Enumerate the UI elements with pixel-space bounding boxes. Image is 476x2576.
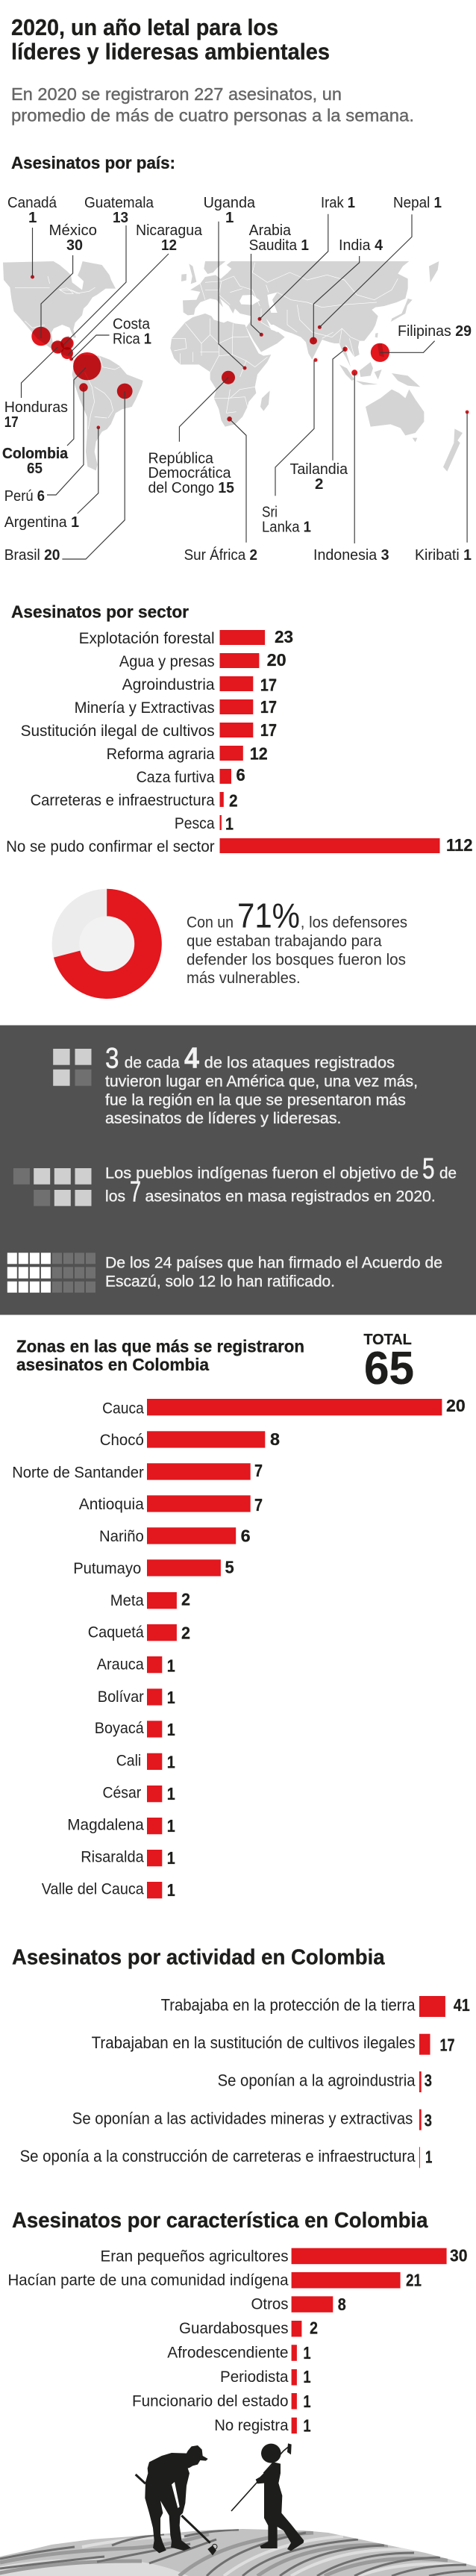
text: pueblos indígenas: 5 — [422, 1153, 435, 1185]
map: madagascar — [260, 390, 270, 411]
map: south america — [72, 355, 143, 470]
country labels: Sur África 2 — [184, 546, 257, 564]
world map — [3, 261, 463, 472]
text: pueblos indígenas: asesinatos en masa registrados en 2020. — [145, 1187, 436, 1205]
bar chart: característica: Funcionario del estado — [132, 2392, 289, 2410]
bar chart: zonas — [12, 1396, 466, 1900]
bar chart: zonas: Boyacá — [95, 1719, 144, 1737]
bar chart: característica: Eran pequeños agricultores — [100, 2247, 288, 2265]
icon: 5 of 7 squares — [13, 1168, 91, 1206]
bar chart: característica: 1 — [303, 2392, 311, 2411]
text: 71% of defenders: que estaban trabajando para — [187, 932, 382, 950]
bar chart: sector: Explotación forestal — [79, 629, 215, 647]
bar chart: zonas: 7 — [254, 1495, 263, 1515]
country labels: 1 — [28, 209, 37, 226]
bar chart: sector: 23 — [275, 627, 293, 646]
heading: actividad: Asesinatos por actividad en Colombia — [12, 1946, 385, 1970]
total 65: TOTAL — [363, 1332, 412, 1348]
bar chart: zonas: Arauca — [97, 1656, 144, 1674]
country labels: Sri — [262, 504, 278, 521]
bar chart: zonas: 1 — [167, 1752, 175, 1771]
bar chart: actividad: 17 — [440, 2035, 455, 2054]
icon: 3 of 4 squares — [53, 1049, 91, 1086]
country labels: del Congo 15 — [148, 479, 234, 496]
bar chart: característica: Otros — [251, 2295, 288, 2313]
bar chart: zonas: 5 — [225, 1558, 234, 1577]
leader lines — [21, 214, 467, 559]
bar chart: característica — [7, 2245, 467, 2435]
bar chart: sector: Pesca — [175, 814, 215, 832]
country labels: 2 — [315, 475, 323, 493]
bar chart: zonas: Valle del Cauca — [42, 1880, 144, 1897]
text: pueblos indígenas — [105, 1153, 457, 1208]
text: 3 de cada 4: de los ataques registrados — [204, 1054, 395, 1072]
illustration: furrowed field — [0, 2529, 476, 2576]
map: eurasia — [183, 261, 409, 367]
country labels: Nicaragua — [136, 222, 203, 239]
country labels: Uganda — [204, 194, 256, 211]
icon: 12 of 24 squares — [7, 1253, 95, 1293]
text: 3 de cada 4: tuvieron lugar en América que, una vez más, — [105, 1073, 418, 1091]
bar chart: actividad — [20, 1995, 470, 2168]
bar chart: zonas: 2 — [181, 1624, 190, 1643]
subtitle: En 2020 se registraron 227 asesinatos, un — [11, 84, 342, 104]
bar chart: sector: Minería y Extractivas — [75, 699, 215, 717]
bar chart: actividad: 3 — [425, 2110, 432, 2130]
bar chart: zonas: 1 — [167, 1688, 175, 1707]
text: 3 de cada 4: de cada — [125, 1054, 180, 1072]
country labels: Perú 6 — [4, 487, 45, 505]
bar chart: zonas: 1 — [167, 1816, 175, 1836]
bar chart: sector: 20 — [267, 650, 286, 670]
bar chart: característica: 30 — [450, 2245, 467, 2265]
text: Acuerdo de Escazú: Escazú, solo 12 lo han ratificado. — [105, 1272, 335, 1290]
bar chart: característica: 1 — [303, 2367, 311, 2386]
text: Acuerdo de Escazú: De los 24 países que han firmado el Acuerdo de — [105, 1253, 442, 1271]
illustration: farmer silhouette — [136, 2445, 217, 2555]
bar chart: zonas: 2 — [181, 1590, 190, 1609]
country labels: Rica 1 — [113, 331, 151, 348]
country labels: Canadá — [7, 194, 57, 211]
bar chart: zonas: Caquetá — [88, 1624, 144, 1641]
map: africa — [170, 314, 271, 427]
bar chart: actividad: Trabajaban en la sustitución de cultivos ilegales — [92, 2033, 416, 2052]
bar chart: zonas: Nariño — [99, 1527, 144, 1545]
title — [11, 14, 330, 64]
bar chart: sector: 2 — [229, 791, 238, 811]
country labels: 65 — [27, 460, 43, 477]
text: pueblos indígenas: 7 — [130, 1176, 141, 1208]
bar chart: sector: No se pudo confirmar el sector — [6, 838, 215, 855]
bar chart: sector: 12 — [250, 744, 268, 764]
bar chart: sector: 1 — [225, 814, 234, 834]
bar chart: actividad: 1 — [425, 2147, 433, 2166]
country labels: Indonesia 3 — [313, 546, 389, 564]
bar chart: actividad: Se oponía a la construcción de carreteras e infraestructura — [20, 2147, 416, 2165]
heading: zonas en Colombia: asesinatos en Colombia — [16, 1355, 209, 1374]
bar chart: sector: Caza furtiva — [137, 768, 215, 786]
bar chart: actividad: Se oponían a la agroindustria — [218, 2071, 416, 2090]
map: new zealand — [443, 428, 463, 472]
subtitle: promedio de más de cuatro personas a la semana. — [11, 106, 414, 125]
text: Acuerdo de Escazú — [105, 1253, 442, 1290]
bar chart: característica: No registra — [214, 2416, 289, 2434]
illustration: child silhouette — [231, 2443, 304, 2551]
heading: asesinatos por sector: Asesinatos por sector — [11, 602, 189, 621]
country labels: Honduras — [4, 399, 68, 416]
text: 71% of defenders: Con un — [187, 914, 234, 932]
text: 3 de cada 4: 3 — [105, 1042, 119, 1075]
text: 71% of defenders: defender los bosques fueron los — [187, 950, 406, 968]
bar chart: zonas: Putumayo — [73, 1559, 141, 1577]
bar chart: sector: 17 — [260, 720, 277, 740]
bar chart: sector: Agua y presas — [119, 652, 215, 670]
bar chart: zonas: Bolívar — [98, 1688, 144, 1706]
title: 2020, un año letal para los — [11, 14, 278, 40]
country labels: 30 — [66, 237, 83, 254]
heading: zonas en Colombia: Zonas en las que más se registraron — [16, 1337, 304, 1356]
bar chart: sector: 6 — [236, 765, 245, 785]
country labels: 12 — [161, 237, 177, 254]
map: australia — [366, 390, 424, 442]
heading: característica: Asesinatos por característica en Colombia — [12, 2209, 428, 2233]
country labels: 13 — [113, 209, 128, 226]
bar chart: zonas: Cauca — [102, 1399, 144, 1417]
bar chart: característica: Periodista — [220, 2368, 289, 2386]
country labels: Arabia — [249, 222, 292, 239]
text: 3 de cada 4: fue la región en la que se presentaron más — [105, 1091, 406, 1109]
bar chart: zonas: Magdalena — [67, 1815, 144, 1833]
country labels: 17 — [4, 414, 19, 431]
bar chart: zonas: Antioquia — [79, 1495, 144, 1513]
bar chart: actividad: 3 — [425, 2071, 432, 2090]
text: pueblos indígenas: Los pueblos indígenas fueron el objetivo de — [105, 1164, 419, 1182]
bar chart: característica: Afrodescendiente — [167, 2344, 288, 2362]
bar chart: actividad: 41 — [454, 1995, 470, 2015]
text: pueblos indígenas: los — [105, 1187, 125, 1205]
bar chart: zonas: 1 — [167, 1656, 175, 1675]
text: 71% of defenders: más vulnerables. — [187, 969, 301, 987]
map: seas — [239, 293, 278, 313]
bar chart: zonas: Cali — [116, 1752, 141, 1770]
country labels: Democrática — [148, 464, 231, 481]
country labels: Nepal 1 — [393, 194, 442, 211]
bar chart: sector: 17 — [260, 676, 277, 695]
bar chart: zonas: Chocó — [100, 1431, 144, 1449]
country labels: Saudita 1 — [249, 237, 309, 254]
country labels: México — [49, 222, 97, 239]
bar chart: característica: 1 — [303, 2343, 311, 2363]
bar chart: zonas: 8 — [270, 1429, 280, 1449]
bar chart: característica: 21 — [406, 2271, 422, 2290]
bar chart: zonas: 1 — [167, 1848, 175, 1868]
bar chart: sector: Carreteras e infraestructura — [31, 791, 215, 809]
bar chart: zonas: Meta — [110, 1591, 144, 1609]
text: pueblos indígenas: de — [439, 1164, 457, 1182]
panel: dark statistics — [0, 1026, 476, 1315]
data circles on the map — [31, 275, 469, 429]
country labels: Costa — [113, 316, 151, 333]
country labels: Brasil 20 — [4, 546, 60, 564]
country labels — [2, 194, 472, 564]
bar chart: zonas: Norte de Santander — [12, 1463, 144, 1481]
bar chart: característica: Hacían parte de una comunidad indígena — [7, 2271, 289, 2289]
text: 3 de cada 4: asesinatos de líderes y lideresas. — [105, 1109, 342, 1127]
text: 3 de cada 4: 4 — [184, 1042, 199, 1075]
heading: asesinatos por país: Asesinatos por país: — [11, 153, 175, 172]
country labels: 1 — [225, 209, 234, 226]
map: scandinavia and british isles — [181, 261, 225, 284]
bar chart: zonas: 6 — [241, 1526, 251, 1546]
map: north america — [3, 261, 116, 358]
bar chart: actividad: Trabajaba en la protección de la tierra — [161, 1995, 416, 2014]
country labels: Argentina 1 — [4, 514, 79, 531]
bar chart: zonas: 1 — [167, 1720, 175, 1739]
bar chart: zonas: 1 — [167, 1880, 175, 1900]
country labels: Colombia — [2, 445, 69, 462]
bar chart: zonas: 1 — [167, 1784, 175, 1803]
text: 71% of defenders: , los defensores — [301, 914, 407, 932]
text: 71% of defenders: 71% — [237, 896, 300, 935]
bar chart: zonas: Risaralda — [81, 1847, 144, 1865]
bar chart: característica: 1 — [303, 2416, 311, 2435]
bar chart: sector — [6, 627, 473, 855]
country labels: Guatemala — [84, 194, 154, 211]
bar chart: característica: 8 — [338, 2295, 346, 2314]
bar chart: zonas: 20 — [446, 1396, 466, 1415]
bar chart: sector: Reforma agraria — [107, 745, 215, 763]
text: 3 de cada 4 — [105, 1042, 418, 1127]
country labels: Lanka 1 — [262, 519, 311, 536]
country labels: Filipinas 29 — [398, 322, 472, 340]
bar chart: sector: Sustitución ilegal de cultivos — [21, 722, 215, 740]
country labels: Tailandia — [289, 461, 348, 478]
bar chart: sector: Agroindustria — [122, 676, 215, 693]
bar chart: zonas: César — [103, 1784, 141, 1802]
heading: zonas en Colombia — [16, 1337, 304, 1374]
bar chart: característica: 2 — [310, 2318, 318, 2338]
bar chart: actividad: Se oponían a las actividades mineras y extractivas — [72, 2109, 413, 2128]
title: líderes y lideresas ambientales — [11, 39, 330, 64]
country labels: Irak 1 — [321, 194, 355, 211]
map: asia pacific islands — [339, 261, 439, 387]
country labels: República — [148, 450, 214, 467]
country labels: Kiribati 1 — [415, 546, 472, 564]
bar chart: característica: Guardabosques — [179, 2319, 288, 2337]
bar chart: sector: 17 — [260, 697, 277, 717]
text: 71% of defenders — [187, 896, 407, 987]
total 65: 65 — [364, 1343, 414, 1394]
bar chart: zonas: 7 — [254, 1461, 263, 1480]
subtitle — [11, 84, 414, 125]
bar chart: sector: 112 — [446, 835, 473, 855]
donut chart: 71% — [52, 889, 162, 999]
country labels: India 4 — [339, 237, 383, 254]
